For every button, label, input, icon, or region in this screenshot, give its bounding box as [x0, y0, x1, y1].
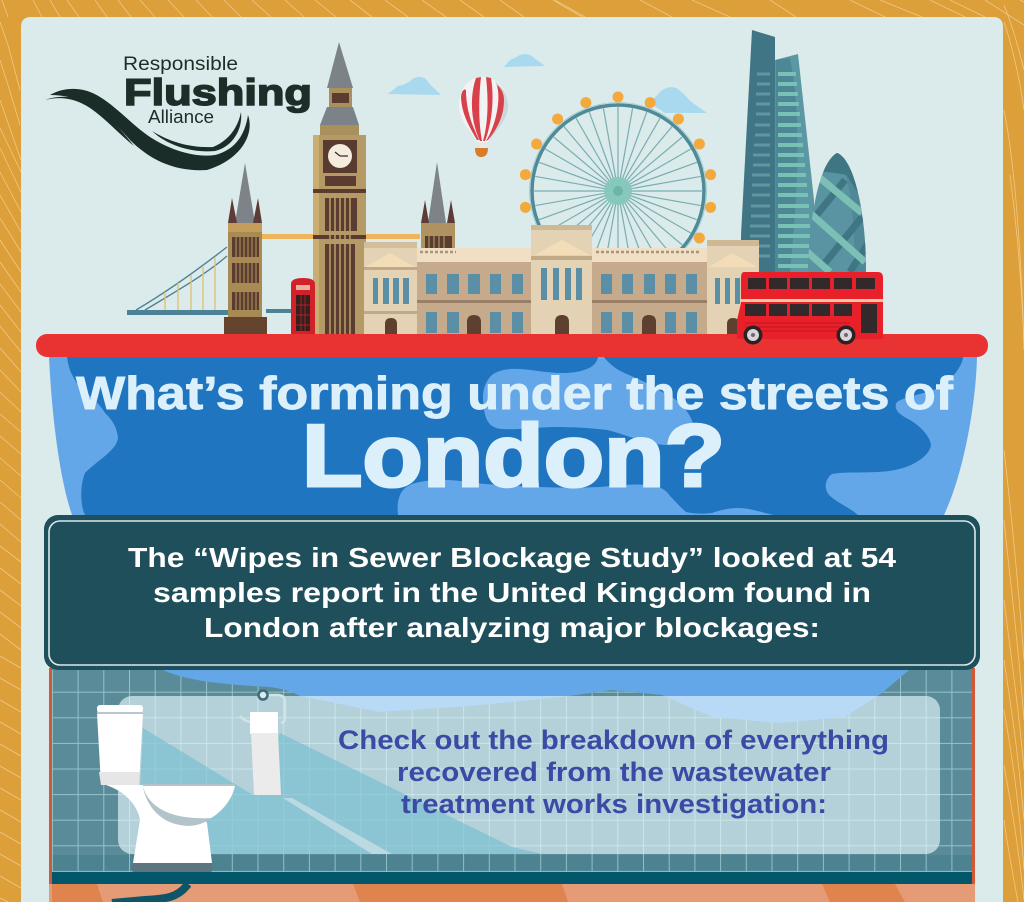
- light water blob: lower: [398, 480, 774, 515]
- tan main blocks: [417, 262, 532, 339]
- window rows: [426, 274, 697, 333]
- red street bar: [36, 334, 988, 357]
- dark info box: [44, 515, 980, 670]
- toilet paper and holder: [240, 690, 285, 795]
- logo swoosh: [45, 89, 250, 170]
- logo: Responsible Flushing Alliance: Flushing: [124, 72, 312, 113]
- Big Ben clock tower: [313, 42, 366, 339]
- bus wheels: [744, 326, 856, 344]
- bridge tower: [224, 163, 267, 339]
- left wing: [364, 242, 417, 339]
- title: [76, 367, 954, 505]
- center pavilion: [531, 225, 592, 339]
- title: London?: [302, 406, 725, 505]
- panel callout text: treatment works investigation:: [401, 789, 827, 819]
- toilet: [97, 705, 235, 872]
- tiled wall: [49, 668, 975, 884]
- bridge cables and deck: [127, 247, 295, 315]
- info box text: The “Wipes in Sewer Blockage Study” looked at 54: [128, 542, 897, 573]
- dark water region: [67, 357, 963, 515]
- skyscraper: gherkin: [808, 153, 866, 272]
- doors: [467, 315, 656, 339]
- right tower with spire: [421, 162, 455, 248]
- logo: Responsible Flushing Alliance: Alliance: [148, 107, 214, 127]
- toilet pedestal: [106, 785, 212, 863]
- blue water blob behind wall: [163, 670, 909, 723]
- toilet cistern: [97, 705, 143, 785]
- skyscrapers: shard towers: [741, 30, 814, 272]
- light beam on panel: [140, 728, 542, 854]
- title: What’s forming under the streets of: [76, 367, 954, 419]
- floor trim: [52, 872, 972, 884]
- hot air balloon: [459, 77, 508, 157]
- toilet bowl: [143, 785, 235, 825]
- info box text: samples report in the United Kingdom found in: [153, 577, 871, 608]
- Tower Bridge: [127, 163, 420, 339]
- clouds: [388, 54, 707, 113]
- info box text: [128, 542, 897, 643]
- orange floor: [49, 884, 975, 902]
- bridge walkway: [262, 234, 420, 239]
- tile grid: [52, 670, 972, 872]
- balustrade: [417, 248, 707, 262]
- red telephone box: [290, 278, 316, 339]
- logo: Responsible Flushing Alliance: [45, 54, 312, 170]
- bathroom wall scene: [49, 668, 975, 902]
- panel callout text: Check out the breakdown of everything: [338, 725, 889, 755]
- info box text: London after analyzing major blockages:: [204, 612, 820, 643]
- blue water tub: [49, 357, 977, 515]
- palace building: [364, 225, 759, 339]
- panel callout text: [338, 725, 889, 819]
- clock face: [328, 144, 352, 168]
- light water blob: centre: [483, 357, 694, 445]
- drain pipe: [112, 884, 188, 902]
- London Eye ferris wheel: [520, 92, 716, 248]
- logo: Responsible Flushing Alliance: Responsible: [123, 54, 238, 75]
- translucent text panel: [118, 696, 940, 854]
- panel callout text: recovered from the wastewater: [397, 757, 831, 787]
- right wing: [707, 240, 759, 339]
- double-decker bus: [737, 272, 883, 344]
